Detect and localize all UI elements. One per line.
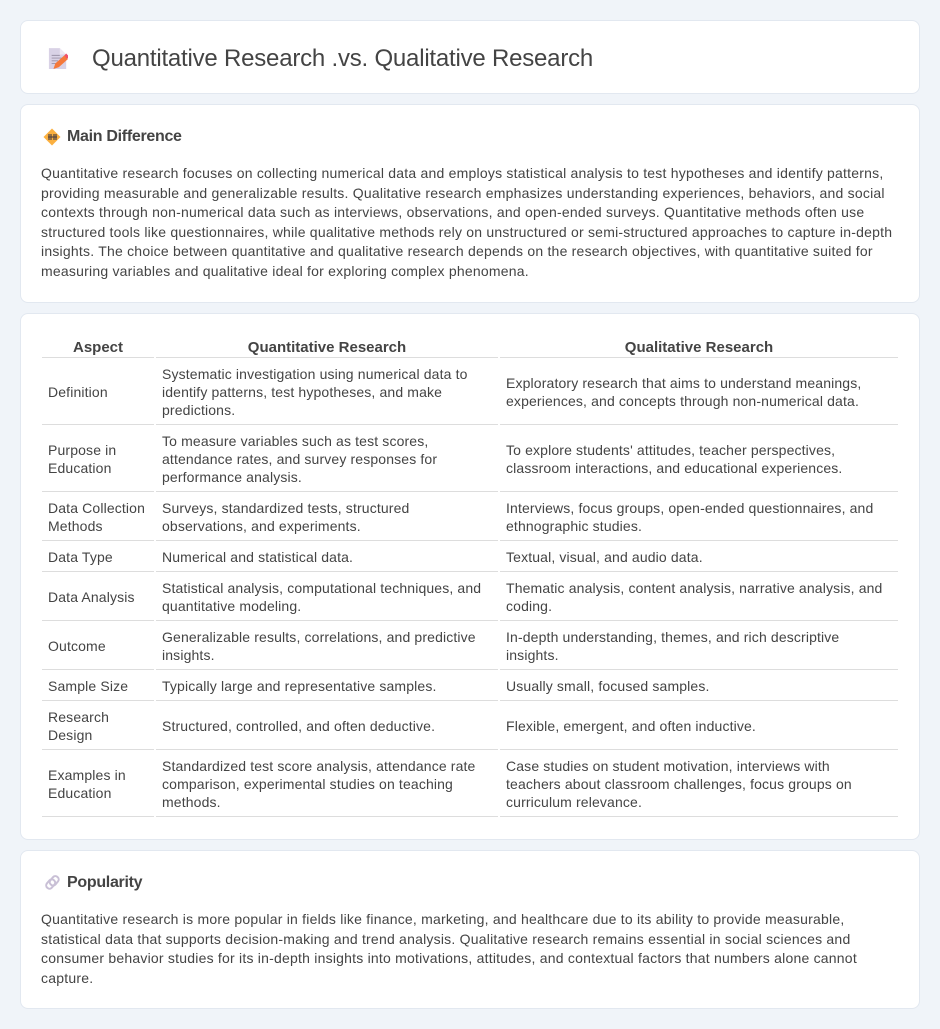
comparison table: Data Type xyxy=(48,549,113,565)
comparison table: Statistical analysis, computational techniques, and xyxy=(162,580,481,596)
comparison table: Case studies on student motivation, interviews with xyxy=(506,758,830,774)
popularity text: capture. xyxy=(41,970,93,986)
comparison table: Education xyxy=(48,785,112,801)
comparison table: Outcome xyxy=(48,638,106,654)
comparison table: performance analysis. xyxy=(162,469,302,485)
popularity text: Quantitative research is more popular in fields like finance, marketing, and healthcare due to its ability to provide measurable, xyxy=(41,911,844,927)
comparison table: insights. xyxy=(162,647,215,663)
panel: comparison table xyxy=(20,313,920,840)
comparison table: Design xyxy=(48,727,92,743)
heading: popularity: Popularity xyxy=(67,874,142,891)
comparison table: attendance rates, and survey responses for xyxy=(162,451,437,467)
comparison table: Usually small, focused samples. xyxy=(506,678,710,694)
main difference text xyxy=(41,165,892,279)
comparison table: comparison, experimental studies on teaching xyxy=(162,776,453,792)
comparison table: Data Analysis xyxy=(48,589,135,605)
comparison table xyxy=(42,339,898,817)
panel: main difference xyxy=(20,104,920,303)
comparison table: Qualitative Research xyxy=(625,339,773,356)
comparison table: teachers about classroom challenges, focus groups on xyxy=(506,776,852,792)
panel: popularity xyxy=(20,850,920,1009)
comparison table: Definition xyxy=(48,384,108,400)
comparison table: experiences, and concepts through non-numerical data. xyxy=(506,393,859,409)
icon: chain link xyxy=(45,875,60,890)
comparison table: Thematic analysis, content analysis, narrative analysis, and xyxy=(506,580,882,596)
comparison table: insights. xyxy=(506,647,559,663)
main difference text: structured tools like questionnaires, while qualitative methods rely on unstructured or semi-structured approaches to capture in-depth xyxy=(41,224,892,240)
comparison table: Purpose in xyxy=(48,442,116,458)
comparison table: Exploratory research that aims to understand meanings, xyxy=(506,375,861,391)
comparison table: Examples in xyxy=(48,767,126,783)
comparison table: Data Collection xyxy=(48,500,145,516)
comparison table: Surveys, standardized tests, structured xyxy=(162,500,409,516)
comparison table: To explore students' attitudes, teacher perspectives, xyxy=(506,442,835,458)
comparison table: Aspect xyxy=(73,339,123,356)
comparison table: classroom interactions, and educational experiences. xyxy=(506,460,842,476)
comparison table: observations, and experiments. xyxy=(162,518,361,534)
popularity text: statistical data that supports decision-making and trend analysis. Qualitative research remains essential in social sciences and xyxy=(41,931,850,947)
main difference text: contexts through non-numerical data such as interviews, observations, and open-ended surveys. Quantitative methods often use xyxy=(41,204,864,220)
comparison table: Education xyxy=(48,460,112,476)
comparison table: Quantitative Research xyxy=(248,339,406,356)
comparison table: quantitative modeling. xyxy=(162,598,301,614)
comparison table: ethnographic studies. xyxy=(506,518,642,534)
popularity text xyxy=(41,911,857,986)
title: Quantitative Research .vs. Qualitative Research xyxy=(92,45,593,72)
main difference text: insights. The choice between quantitative and qualitative research depends on the research objectives, with quantitative suited for xyxy=(41,243,873,259)
comparison table: curriculum relevance. xyxy=(506,794,642,810)
comparison table: methods. xyxy=(162,794,221,810)
comparison table: Structured, controlled, and often deductive. xyxy=(162,718,435,734)
comparison table: In-depth understanding, themes, and rich descriptive xyxy=(506,629,839,645)
main difference text: measuring variables and qualitative ideal for exploring complex phenomena. xyxy=(41,263,529,279)
comparison table: Typically large and representative samples. xyxy=(162,678,436,694)
comparison table: Standardized test score analysis, attendance rate xyxy=(162,758,476,774)
comparison table: Interviews, focus groups, open-ended questionnaires, and xyxy=(506,500,873,516)
comparison table: Textual, visual, and audio data. xyxy=(506,549,703,565)
comparison table: Generalizable results, correlations, and predictive xyxy=(162,629,476,645)
comparison table: To measure variables such as test scores, xyxy=(162,433,428,449)
comparison table: Methods xyxy=(48,518,103,534)
panel: title card xyxy=(20,20,920,94)
comparison table: Research xyxy=(48,709,109,725)
heading: main difference: Main Difference xyxy=(67,128,182,145)
comparison table: coding. xyxy=(506,598,552,614)
comparison table: Flexible, emergent, and often inductive. xyxy=(506,718,756,734)
comparison table: Sample Size xyxy=(48,678,128,694)
icon: road sign diamond xyxy=(44,128,60,146)
main difference text: Quantitative research focuses on collecting numerical data and employs statistical analysis to test hypotheses and identify patterns, xyxy=(41,165,883,181)
main difference text: providing measurable and generalizable results. Qualitative research emphasizes understanding experiences, behaviors, and social xyxy=(41,185,885,201)
popularity text: consumer behavior studies for its in-depth insights into motivations, attitudes, and contextual factors that numbers alone cannot xyxy=(41,950,857,966)
comparison table: identify patterns, test hypotheses, and make xyxy=(162,384,442,400)
comparison table: predictions. xyxy=(162,402,235,418)
comparison table: Numerical and statistical data. xyxy=(162,549,353,565)
icon: document with pencil xyxy=(49,48,68,69)
comparison table: Systematic investigation using numerical data to xyxy=(162,366,468,382)
